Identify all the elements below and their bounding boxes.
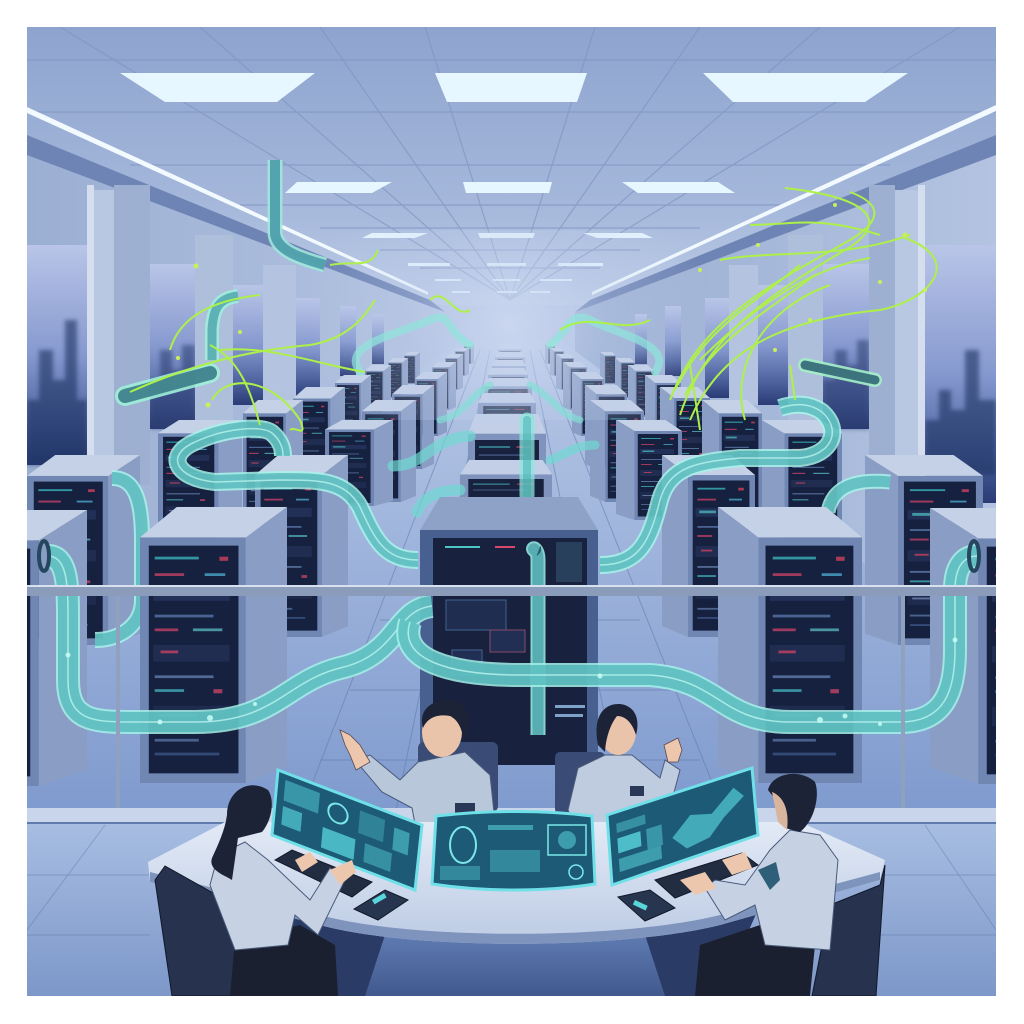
- right light strip: [592, 105, 996, 295]
- right operator: [680, 774, 885, 996]
- neon green data strands: [130, 188, 937, 431]
- foreground floor: [27, 808, 996, 996]
- server racks mid rows: [27, 455, 983, 645]
- man pointing: [339, 700, 498, 822]
- pipe couplings: [39, 541, 979, 571]
- left operator with ponytail: [155, 785, 356, 996]
- keyboards and tablets: [275, 850, 758, 921]
- left light strip: [27, 107, 428, 295]
- mid and far coolant pipes: [95, 317, 890, 640]
- ceiling: [27, 27, 996, 305]
- scene base colour: [38, 645, 978, 652]
- right windows: [635, 185, 996, 505]
- side walls with windows: [27, 105, 996, 564]
- server racks far rows: [158, 344, 842, 540]
- floor behind railing: [27, 340, 996, 815]
- left holographic screen: [272, 770, 422, 890]
- woman with raised hand: [555, 704, 682, 822]
- front server racks: [0, 507, 1024, 786]
- central server rack: [420, 497, 598, 765]
- glass railing: [27, 585, 996, 814]
- right holographic screen: [607, 768, 758, 885]
- far back wall: [436, 305, 584, 351]
- green particles: [176, 203, 927, 408]
- centre holographic screen: [432, 812, 595, 890]
- ceiling lights: [120, 73, 908, 293]
- control desk: [148, 822, 885, 996]
- bubbles in pipes: [66, 638, 958, 726]
- main front coolant pipes: [39, 541, 979, 722]
- central vertical pipe: [534, 549, 538, 735]
- left windows: [27, 185, 384, 485]
- hanging and floating pipes: [125, 160, 875, 396]
- atmospheric haze at vanishing point: [338, 230, 681, 420]
